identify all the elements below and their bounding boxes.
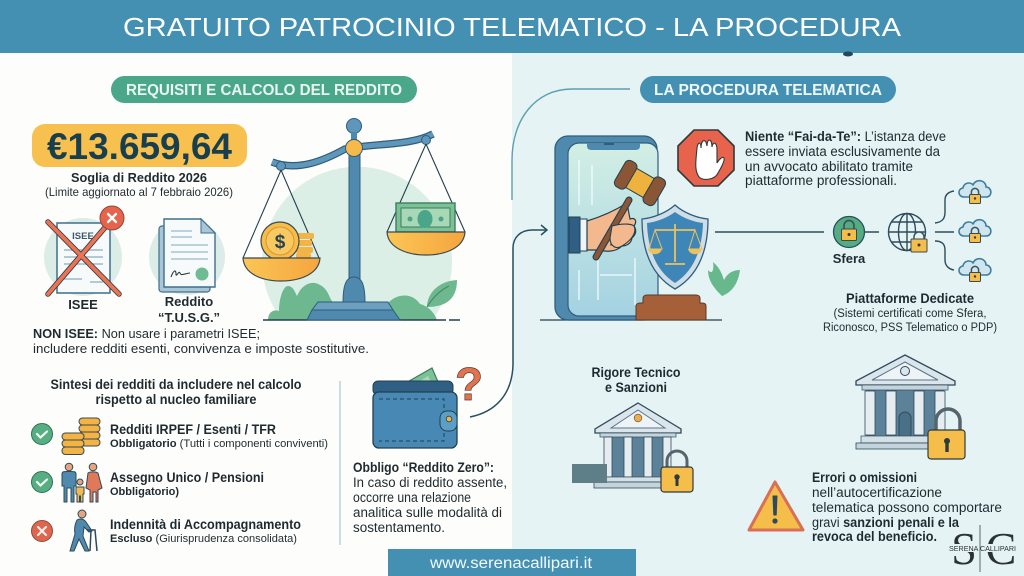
icon: network globe and clouds (865, 181, 991, 282)
text: redditi: Redditi IRPEF / Esenti / TFR (110, 422, 276, 437)
label: ISEE: ISEE (68, 297, 98, 312)
text: non ISEE note (33, 326, 369, 356)
background: left panel (0, 53, 512, 576)
icon: check (32, 472, 52, 492)
icon: cross (32, 520, 52, 542)
logo: Serena Callipari (949, 523, 1017, 574)
background: right panel (512, 53, 1024, 576)
divider (339, 381, 341, 545)
text: sanctions warning: telematica possono comportare (812, 500, 1002, 515)
text: indennita: Escluso (Giurisprudenza consolidata) (110, 533, 297, 545)
icon: wallet with question mark (373, 358, 483, 448)
icon: check (32, 424, 52, 444)
icon: warning triangle (749, 482, 803, 530)
icon: Sfera lock (834, 216, 864, 248)
text: redditi: Obbligatorio (Tutti i componenti conviventi) (110, 438, 328, 450)
text: reddito zero: sostentamento. (353, 520, 445, 535)
text: reddito zero: Obbligo “Reddito Zero”: (353, 460, 494, 475)
row: assegno unico (32, 463, 264, 502)
text: non ISEE note: NON ISEE: Non usare i parametri ISEE; (33, 326, 260, 341)
text: niente fai-da-te: Niente “Fai-da-Te”: L’istanza deve (745, 129, 946, 144)
text: assegno: Assegno Unico / Pensioni (110, 470, 264, 485)
redaction block (572, 464, 607, 483)
text: niente fai-da-te: essere inviata esclusivamente da (745, 144, 940, 159)
text: sanctions warning: revoca del beneficio. (812, 529, 937, 544)
row: redditi IRPEF (32, 418, 328, 454)
title: GRATUITO PATROCINIO TELEMATICO - LA PROCEDURA (123, 12, 902, 42)
connector line (715, 231, 824, 233)
text: piattaforme dedicate (823, 291, 997, 334)
illustration: balance scale (243, 118, 465, 320)
heading: procedura (640, 76, 896, 103)
heading: rigore tecnico (592, 365, 680, 395)
text: niente fai-da-te (745, 129, 946, 188)
text: sanctions warning: nell’autocertificazione (812, 485, 942, 500)
heading: rigore tecnico: e Sanzioni (605, 380, 667, 395)
heading: procedura: LA PROCEDURA TELEMATICA (654, 82, 882, 99)
text: indennita: Indennità di Accompagnamento (110, 517, 301, 532)
text: sanctions warning: Errori o omissioni (812, 470, 917, 485)
heading: requisiti: REQUISITI E CALCOLO DEL REDDITO (126, 82, 402, 99)
text: indennita (110, 517, 301, 545)
text: sanctions warning: gravi sanzioni penali e la (812, 515, 959, 530)
label: Sfera: Sfera (833, 251, 866, 266)
footer: website (388, 549, 636, 576)
income threshold callout: €13.659,64 (47, 126, 232, 167)
icon: ISEE crossed out: ISEE (72, 231, 94, 242)
icon: TUSG document (149, 219, 225, 295)
heading: income summary (50, 377, 302, 407)
text: non ISEE note: includere redditi esenti, convivenza e imposte sostitutive. (33, 341, 369, 356)
logo: Serena Callipari: SERENA CALLIPARI (949, 546, 1016, 553)
text: niente fai-da-te: un avvocato abilitato tramite (745, 159, 913, 174)
connector arrow: wallet to phone (470, 89, 630, 417)
panel: requirements and income calculation (32, 76, 507, 551)
income threshold callout: (Limite aggiornato al 7 febbraio 2026) (45, 185, 233, 199)
text: piattaforme dedicate: Piattaforme Dedicate (846, 291, 974, 306)
text: assegno (110, 470, 264, 498)
label: Reddito TUSG: Reddito (165, 294, 213, 309)
heading: requisiti (111, 76, 417, 103)
text: niente fai-da-te: piattaforme professionali. (745, 173, 897, 188)
income threshold callout: Soglia di Reddito 2026 (71, 170, 207, 185)
footer: website: www.serenacallipari.it (429, 555, 593, 572)
text: reddito zero: occorre una relazione (353, 490, 471, 505)
logo: Serena Callipari: C (986, 523, 1016, 574)
text: piattaforme dedicate: (Sistemi certificati come Sfera, (834, 308, 986, 320)
icon: small courthouse with padlock (594, 403, 693, 492)
label: Reddito TUSG (158, 294, 220, 325)
illustration: phone with gavel and shield (540, 136, 740, 320)
icon: large courthouse with padlock (856, 355, 965, 459)
panel: telematic procedure (540, 76, 1002, 544)
illustration: balance scale: $ (275, 232, 286, 253)
heading: rigore tecnico: Rigore Tecnico (592, 365, 680, 380)
text: assegno: Obbligatorio) (110, 486, 179, 498)
text: redditi (110, 422, 328, 450)
text: reddito zero: In caso di reddito assente, (353, 475, 507, 490)
icon: family (62, 463, 102, 502)
heading: income summary: Sintesi dei redditi da includere nel calcolo (50, 377, 302, 392)
text: piattaforme dedicate: Riconosco, PSS Telematico o PDP) (823, 322, 997, 334)
heading: income summary: rispetto al nucleo familiare (96, 392, 257, 407)
label: Reddito TUSG: “T.U.S.G.” (158, 310, 220, 325)
text: sanctions warning (812, 470, 1002, 544)
header banner (0, 0, 1024, 56)
income threshold callout (32, 124, 247, 199)
icon: ISEE crossed out (44, 206, 124, 296)
text: reddito zero: analitica sulle modalità di (353, 505, 502, 520)
icon: wallet with question mark: ? (455, 358, 483, 410)
logo: Serena Callipari: S (951, 523, 977, 574)
row: indennita (32, 510, 301, 551)
icon: coin stacks (62, 418, 100, 454)
icon: stop hand (678, 130, 734, 186)
text: reddito zero (353, 460, 507, 535)
icon: person with walker (70, 510, 97, 551)
